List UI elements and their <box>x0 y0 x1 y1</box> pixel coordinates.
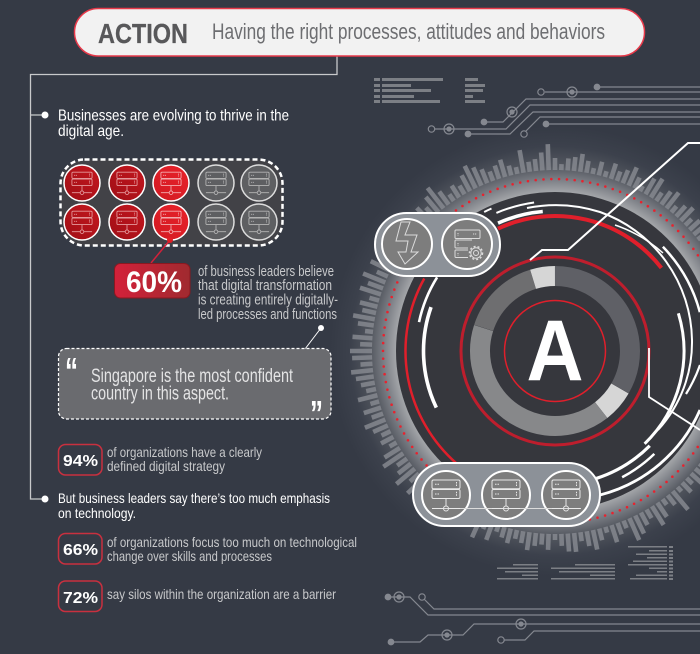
concentric arcs <box>343 139 700 563</box>
pill: networked servers icons <box>413 463 600 526</box>
connector tree line <box>30 56 337 499</box>
segmented gray ring <box>450 246 660 456</box>
inner red circle <box>504 300 606 402</box>
dark disc <box>396 192 700 510</box>
stat: 60 percent: 60% <box>126 266 182 299</box>
decorative data lines bottom <box>497 546 673 580</box>
stat: 66 percent: of organizations focus too much on technological <box>107 534 357 550</box>
red dotted ring <box>383 179 700 523</box>
stat: 94 percent: of organizations have a clearly <box>107 444 262 460</box>
stat: 60 percent: led processes and functions <box>198 306 337 323</box>
circular graphic <box>330 126 700 576</box>
callout: Singapore quote <box>58 325 331 434</box>
stat: 66 percent: 66% <box>63 542 98 559</box>
decorative data lines top <box>374 78 485 103</box>
callout: Singapore quote: ” <box>310 393 323 434</box>
short upper right arc <box>615 225 663 253</box>
stat: 72 percent <box>58 581 336 612</box>
stat: 60 percent: is creating entirely digitally- <box>198 292 338 308</box>
heading: too much emphasis on technology: But business leaders say there’s too much emphasis <box>58 490 330 506</box>
stat: 66 percent <box>58 534 357 564</box>
subtitle: Having the right processes, attitudes and behaviors <box>212 19 605 44</box>
callout: Singapore quote: Singapore is the most confident <box>91 366 294 387</box>
stat: 60 percent: that digital transformation <box>198 277 332 294</box>
stat: 94 percent <box>58 444 262 475</box>
callout line lower <box>649 348 700 430</box>
icon: server with gear <box>442 219 492 269</box>
short lower right arc <box>686 365 700 394</box>
heading: too much emphasis on technology: on technology. <box>58 505 136 521</box>
letter A: A <box>526 303 584 399</box>
radial data bars <box>350 144 700 552</box>
heading: businesses evolving <box>42 108 289 140</box>
title: ACTION: ACTION <box>98 18 188 49</box>
stat: 66 percent: change over skills and processes <box>107 548 272 564</box>
title banner <box>74 8 644 56</box>
heading: businesses evolving: Businesses are evolving to thrive in the <box>58 108 289 124</box>
icon: lightning arrow <box>382 219 432 269</box>
callout: Singapore quote: country in this aspect. <box>91 384 229 404</box>
outer lower arc <box>600 410 700 495</box>
circuit lines bottom <box>385 592 700 645</box>
callout: Singapore quote: “ <box>65 350 78 391</box>
stat: 72 percent: say silos within the organization are a barrier <box>107 586 336 602</box>
outer glow <box>330 126 700 576</box>
stat: 60 percent <box>114 237 338 323</box>
stat: 94 percent: defined digital strategy <box>107 458 225 474</box>
stat: 94 percent: 94% <box>63 453 98 470</box>
heading: too much emphasis on technology <box>42 490 330 521</box>
heading: businesses evolving: digital age. <box>58 123 124 140</box>
callout line upper <box>530 143 700 260</box>
pill: energy and server settings icons <box>375 213 500 276</box>
stat: 72 percent: 72% <box>63 590 98 607</box>
main thin arc <box>527 205 692 430</box>
stat: 60 percent: of business leaders believe <box>198 263 334 280</box>
panel: server pictogram 60 percent <box>60 160 282 246</box>
circuit lines top <box>428 84 700 137</box>
